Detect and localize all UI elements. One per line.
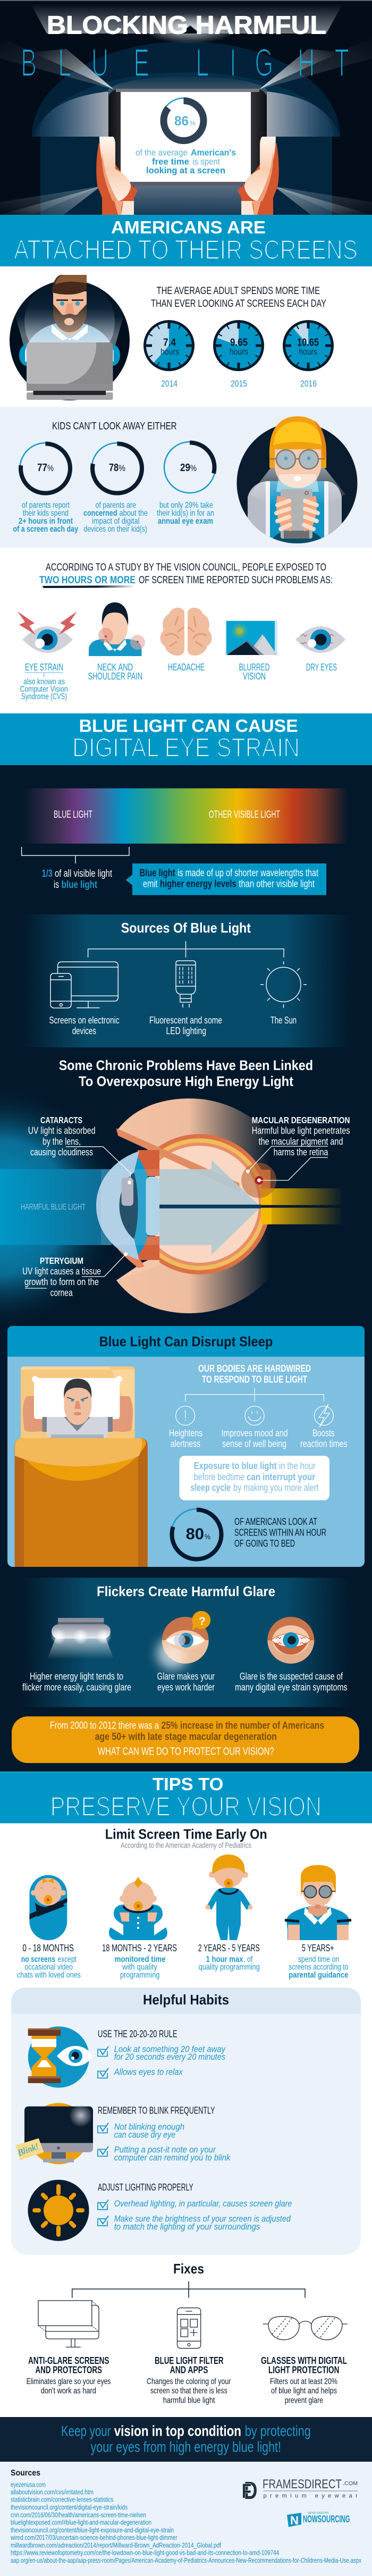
text: cataracts: CATARACTS <box>40 1115 82 1126</box>
panel: helpful habits <box>11 1987 361 2255</box>
text: age guidance: 1 hour max <box>206 1955 243 1964</box>
heading: Sources <box>11 2469 40 2478</box>
chart: light spectrum <box>22 788 349 844</box>
text: americans look at screens: SCREENS WITHIN AN HOUR <box>234 1528 326 1538</box>
logo: nowsourcing: DEVELOPED BY <box>308 2512 329 2515</box>
illustration: man in bed <box>15 1366 148 1571</box>
text: adjust lighting: ADJUST LIGHTING PROPERLY <box>98 2182 193 2193</box>
panel: fixes <box>27 2261 348 2405</box>
callout: exposure: Exposure to blue light <box>194 1461 276 1471</box>
text: symptom labels: VISION <box>243 671 266 682</box>
text: stat 78: impact of digital <box>92 517 139 526</box>
left hand <box>96 137 138 215</box>
source list <box>10 2480 361 2564</box>
text: age guidance: quality programming <box>199 1963 260 1972</box>
icon: standing child in onesie <box>205 1855 253 1940</box>
text: vision council study: TWO HOURS OR MORE <box>39 575 136 586</box>
text: filter fix: harmful blue light <box>163 2396 215 2405</box>
text: filter fix: AND APPS <box>170 2364 208 2375</box>
text: age guidance: , of <box>243 1955 253 1964</box>
chart: clock 2015: 9.65 <box>230 337 248 349</box>
text: stat 29: annual eye exam <box>158 517 213 526</box>
icon: sun lighting <box>28 2180 89 2241</box>
macula <box>241 1163 276 1198</box>
text: age guidance: screens according to <box>289 1963 348 1972</box>
text: filter fix: Changes the coloring of your <box>147 2377 231 2386</box>
panel: closing banner: Keep your <box>61 2423 111 2439</box>
heading: limit screen time: Limit Screen Time Early On <box>105 1826 267 1842</box>
text: vision council study <box>39 562 333 586</box>
text: effects: alertness <box>171 1439 200 1449</box>
tablet caption <box>136 148 236 175</box>
chart: clock 2016: 10.65 <box>297 337 319 349</box>
icon: glare eye <box>157 1611 210 1669</box>
icon: phone with apps <box>177 2308 201 2348</box>
source list: thevisioncouncil.org/content/blue-light-exposure-and-digital-eye-strain <box>11 2526 174 2534</box>
text: cataracts: by the lens, <box>43 1136 81 1147</box>
illustration: man at laptop <box>10 275 130 400</box>
logo: framesdirect: .COM <box>343 2481 358 2487</box>
text: source labels: devices <box>72 1026 96 1036</box>
donut 80% <box>171 1509 222 1560</box>
text: 20-20-20 rule: for 20 seconds every 20 minutes <box>114 2052 225 2062</box>
heading: Flickers Create Harmful Glare <box>97 1583 275 1599</box>
text: anti-glare fix: don't work as hard <box>41 2387 96 2396</box>
text: anti-glare fix: Eliminates glare so your eyes <box>27 2377 111 2386</box>
text: age labels <box>22 1943 334 1953</box>
callout: macular degeneration statistic <box>12 1716 359 1763</box>
panel: closing banner <box>0 2417 372 2462</box>
text: computer vision syndrome note <box>20 673 68 701</box>
logo: framesdirect: premium eyewear <box>264 2493 358 2499</box>
text: filter fix: BLUE LIGHT FILTER <box>155 2355 223 2366</box>
panel: kids section <box>0 407 372 555</box>
text: age guidance: parental guidance <box>289 1970 349 1979</box>
source list: wired.com/2017/03/uncertain-science-behind-phones-blue-light-dimmer <box>10 2533 177 2541</box>
iris and ciliary <box>96 1150 159 1260</box>
icon: monitor with blink note <box>15 2103 93 2164</box>
icon: alert <box>176 1406 195 1425</box>
text: age guidance: monitored time <box>115 1955 166 1964</box>
title glow <box>31 4 343 44</box>
chart: clock 2015: hours <box>230 347 248 357</box>
text: computer vision syndrome note: Computer Vision <box>20 685 68 694</box>
chart: clock 2014: 7.4 <box>163 337 176 349</box>
text: blink frequently: Putting a post-it note on your <box>114 2145 216 2155</box>
text: flicker captions: eyes work harder <box>157 1682 215 1692</box>
icon: strained eye <box>267 1617 315 1664</box>
heading: limit screen time <box>105 1826 267 1850</box>
text: flicker captions <box>22 1671 348 1692</box>
text: americans look at screens: OF AMERICANS LOOK AT <box>234 1516 317 1527</box>
optic beam <box>261 1170 343 1224</box>
chart: clock 2016: 2016 <box>300 379 317 389</box>
donut 29% <box>164 442 215 493</box>
callout: blue light wavelengths: emit <box>143 879 158 890</box>
heading: Helpful Habits <box>143 1992 229 2008</box>
text: stat 29: their kid(s) in for an <box>157 509 214 518</box>
text: stat 29 <box>157 501 214 526</box>
text: pterygium: UV light causes a tissue <box>22 1266 101 1277</box>
text: age guidance: occasional video <box>24 1963 73 1972</box>
bracket <box>22 847 129 863</box>
panel: hero header <box>0 0 372 231</box>
icon: sun <box>260 961 307 1008</box>
title line 1: BLOCKING HARMFUL <box>47 11 326 39</box>
text: one third of visible light: blue light <box>62 879 98 891</box>
icon: blurred vision <box>225 620 277 655</box>
donut 77%: % <box>47 463 54 473</box>
icon: bolt <box>314 1404 333 1427</box>
heading: Blue Light Can Disrupt Sleep <box>99 1333 273 1349</box>
donut 29%: % <box>190 463 197 473</box>
callout: macular degeneration statistic: 25% increase in the number of Americans <box>162 1721 324 1732</box>
text: macular degeneration: MACULAR DEGENERATION <box>252 1115 350 1126</box>
text: effects <box>169 1428 348 1449</box>
subheading: DIGITAL EYE STRAIN <box>72 733 300 762</box>
text: glasses fix <box>261 2355 347 2405</box>
text: age guidance: except <box>57 1955 77 1964</box>
icon: hourglass and eye <box>28 2026 94 2088</box>
text: stat 29: but only 29% take <box>159 501 213 510</box>
panel: sources footer <box>0 2462 372 2576</box>
text: stat 78 <box>83 501 148 534</box>
callout: blue light wavelengths <box>126 863 326 895</box>
text: blink frequently: REMEMBER TO BLINK FREQUENTLY <box>98 2105 215 2116</box>
text: glasses fix: prevent glare <box>285 2396 323 2405</box>
chart: light spectrum: OTHER VISIBLE LIGHT <box>209 809 280 820</box>
callout: macular degeneration statistic: WHAT CAN WE DO TO PROTECT OUR VISION? <box>98 1746 274 1758</box>
text: source labels <box>49 1015 297 1036</box>
text: blink frequently <box>98 2105 231 2163</box>
source list: allaboutvision.com/cvs/irritated.htm <box>11 2488 94 2496</box>
icon: flickering lamp <box>47 1618 114 1659</box>
connector <box>72 2281 305 2298</box>
text: macular degeneration <box>252 1115 350 1157</box>
text: stat 78: about the <box>119 509 148 518</box>
optic nerve line <box>159 1205 343 1209</box>
callout: blue light wavelengths: Blue light <box>139 868 175 879</box>
text: stat 77: of a screen each day <box>13 525 78 534</box>
text: source labels: The Sun <box>270 1015 297 1026</box>
chart: light spectrum: BLUE LIGHT <box>54 809 92 820</box>
callout: exposure <box>180 1456 329 1500</box>
logo: framesdirect <box>242 2477 358 2504</box>
source list: millwardbrown.com/adreaction/2014/report/Millward-Brown_AdReaction-2014_Global.pdf <box>11 2541 221 2549</box>
right hand <box>238 137 279 215</box>
text: pterygium <box>22 1256 101 1298</box>
donut 86%: 86 <box>174 114 189 129</box>
donut 78%: 78 <box>109 462 119 474</box>
text: anti-glare fix: AND PROTECTORS <box>35 2364 102 2375</box>
icon: anti-glare screen <box>38 2301 99 2347</box>
text: anti-glare fix <box>27 2355 111 2396</box>
hands <box>96 137 279 215</box>
text: age labels: 0 - 18 MONTHS <box>22 1943 74 1953</box>
heading: TIPS TO <box>153 1774 223 1794</box>
donut 78% <box>91 443 142 494</box>
callout lines <box>25 1146 328 1288</box>
text: one third of visible light: 1/3 <box>42 868 53 879</box>
text: macular degeneration: harms the retina <box>274 1147 328 1157</box>
text: stat 78: of parents are <box>96 501 136 510</box>
tablet caption: American's <box>191 148 236 158</box>
donut 80%: % <box>205 1532 210 1541</box>
source list: bluelightexposed.com/#blue-light-and-macular-degeneration <box>11 2519 151 2527</box>
heading: chronic problems: Some Chronic Problems Have Been Linked <box>59 1058 313 1073</box>
text: effects: Boosts <box>312 1428 335 1439</box>
callout: blue light wavelengths: is made of up of shorter wavelengths that <box>177 868 319 879</box>
callout: macular degeneration statistic: age 50+ with late stage macular degeneration <box>95 1732 277 1743</box>
text: macular degeneration: the macular pigment and <box>259 1136 343 1147</box>
heading: AMERICANS ARE <box>111 217 266 237</box>
blanket <box>15 1438 148 1571</box>
text: blink frequently: can cause dry eye <box>114 2130 175 2140</box>
text: symptom labels: NECK AND <box>97 662 133 673</box>
icon: dry eyes <box>295 626 345 653</box>
text: 20-20-20 rule: Look at something 20 feet away <box>114 2044 226 2054</box>
donut 29%: 29 <box>180 462 190 474</box>
donut 78%: % <box>119 463 125 473</box>
text: age labels: 2 YEARS - 5 YEARS <box>198 1943 260 1953</box>
icon: screens <box>50 962 118 1008</box>
text: anti-glare fix: ANTI-GLARE SCREENS <box>28 2355 109 2366</box>
text: effects: Improves mood and <box>221 1428 288 1439</box>
glasses <box>270 450 325 469</box>
text: one third of visible light: is <box>54 879 59 891</box>
icon: child with glasses <box>285 1865 351 1940</box>
text: flicker captions: flicker more easily, causing glare <box>22 1682 131 1692</box>
text: stat 77: 2+ hours in front <box>19 517 73 526</box>
text: 20-20-20 rule <box>98 2029 226 2078</box>
text: stat 77: their kids spend <box>23 509 69 518</box>
chart: clock 2016: hours <box>299 347 317 357</box>
text: pterygium: PTERYGIUM <box>40 1256 83 1266</box>
illustration: child with phone <box>237 416 357 555</box>
callout: blue light wavelengths: higher energy levels <box>160 879 236 890</box>
text: source labels: Screens on electronic <box>49 1015 120 1026</box>
heading: KIDS CAN'T LOOK AWAY EITHER <box>52 421 177 432</box>
icon: seated toddler <box>109 1877 167 1940</box>
text: source labels: LED lighting <box>166 1026 206 1036</box>
text: glasses fix: Filters out at least 20% <box>270 2377 337 2386</box>
text: average adult heading: THE AVERAGE ADULT SPENDS MORE TIME <box>157 286 320 297</box>
text: americans look at screens <box>234 1516 326 1549</box>
icon: glasses <box>263 2317 348 2340</box>
icon: led bulb <box>176 961 196 1008</box>
text: hardwired <box>198 1363 311 1385</box>
text: age guidance: with quality <box>122 1963 157 1972</box>
title line 2: BLUELIGHT <box>21 41 349 85</box>
chart: clock 2015 <box>213 320 264 389</box>
text: hardwired: OUR BODIES ARE HARDWIRED <box>198 1363 311 1374</box>
text: glasses fix: GLASSES WITH DIGITAL <box>261 2355 347 2366</box>
icon: monitor with blink note: Blink! <box>16 2141 40 2158</box>
text: glasses fix: LIGHT PROTECTION <box>268 2364 339 2375</box>
panel: tips to preserve band <box>0 1772 372 1823</box>
text: symptom labels: BLURRED <box>239 662 270 673</box>
heading: limit screen time: According to the American Academy of Pediatrics <box>121 1841 251 1850</box>
logo: nowsourcing <box>287 2512 350 2527</box>
text: hardwired: TO RESPOND TO BLUE LIGHT <box>202 1374 307 1385</box>
text: stat 78: concerned <box>83 509 117 518</box>
text: one third of visible light <box>42 868 113 891</box>
text: effects: reaction times <box>300 1439 348 1449</box>
panel: closing banner: vision in top condition <box>114 2423 241 2439</box>
text: flicker captions: Glare makes your <box>157 1671 215 1682</box>
text: stat 77 <box>13 501 78 534</box>
text: age guidance: spend time on <box>298 1955 339 1964</box>
text: computer vision syndrome note: also known as <box>23 677 65 686</box>
text: filter fix <box>147 2355 231 2405</box>
text: cataracts <box>28 1115 96 1157</box>
callout: exposure: in the hour <box>279 1461 316 1471</box>
text: glasses fix: of blue light and helps <box>271 2387 337 2396</box>
text: effects: Heightens <box>169 1428 202 1439</box>
text: cataracts: UV light is absorbed <box>28 1126 96 1136</box>
text: adjust lighting: to match the lighting of your surroundings <box>114 2222 260 2231</box>
heading: Sources Of Blue Light <box>121 920 251 936</box>
source list: eyezenusa.com <box>11 2480 46 2488</box>
text: filter fix: screen so that there is less <box>150 2387 227 2396</box>
callout: exposure: before bedtime <box>194 1472 244 1482</box>
text: age guidance: no screens <box>21 1955 55 1964</box>
text: age guidance <box>17 1955 349 1979</box>
panel: americans are attached band <box>0 215 372 266</box>
source list: https://www.reviewofoptometry.com/ce/the-lowdown-on-blue-light-good-vs-bad-and-its-connection-to-amd-109744 <box>11 2549 279 2557</box>
text: symptom labels: SHOULDER PAIN <box>88 671 142 682</box>
text: symptom labels <box>25 662 337 682</box>
callout: exposure: by making you more alert <box>233 1482 319 1493</box>
text: age guidance: programming <box>120 1970 159 1979</box>
donut 77%: 77 <box>37 462 47 474</box>
tablet <box>108 89 267 186</box>
text: adjust lighting <box>98 2182 292 2231</box>
text: source labels: Fluorescent and some <box>149 1015 222 1026</box>
donut 80%: 80 <box>186 1525 204 1543</box>
text: average adult heading <box>151 286 326 309</box>
text: harmful blue light: HARMFUL BLUE LIGHT <box>21 1203 86 1212</box>
text: pterygium: cornea <box>50 1288 73 1298</box>
panel: sources of blue light <box>21 914 351 1047</box>
panel: closing banner: your eyes from high energy blue light! <box>90 2439 281 2455</box>
text: stat 78: devices on their kid(s) <box>84 525 147 534</box>
chart: clock 2015: 2015 <box>231 379 247 389</box>
chart: clock 2014: hours <box>160 347 179 357</box>
tablet caption: of the average <box>136 148 188 158</box>
icon: glare eye: ? <box>199 1615 206 1627</box>
icon: brain headache <box>160 608 212 656</box>
diagram: eye anatomy <box>0 1098 350 1314</box>
chart: clock 2016 <box>283 320 334 389</box>
light arrow <box>159 1160 261 1255</box>
callout: exposure: sleep cycle <box>190 1482 231 1493</box>
source list: cnn.com/2016/06/30/health/americans-screen-time-nielsen <box>11 2511 146 2519</box>
heading: chronic problems: To Overexposure High Energy Light <box>79 1073 293 1089</box>
connector <box>185 1388 324 1402</box>
text: 20-20-20 rule: Allows eyes to relax <box>114 2068 183 2077</box>
panel: blue light can disrupt sleep <box>7 1326 365 1571</box>
phone and fingers <box>276 489 318 539</box>
callout: blue light wavelengths: than other visible light <box>239 879 315 890</box>
text: stat 77: of parents report <box>22 501 70 510</box>
text: 20-20-20 rule: USE THE 20-20-20 RULE <box>98 2029 177 2040</box>
text: age labels: 5 YEARS+ <box>302 1943 334 1953</box>
text: flicker captions: Glare is the suspected cause of <box>240 1671 343 1682</box>
logo: framesdirect: D <box>244 2477 257 2504</box>
source list: statisticbrain.com/corrective-lenses-statistics <box>11 2496 114 2504</box>
text: age guidance: chats with loved ones <box>17 1970 81 1979</box>
icon: neck and shoulder pain <box>89 602 145 656</box>
icon: smile <box>245 1406 264 1425</box>
text: pterygium: growth to form on the <box>24 1277 99 1287</box>
logo: framesdirect: F <box>242 2480 251 2503</box>
text: age labels: 18 MONTHS - 2 YEARS <box>102 1943 177 1953</box>
tablet caption: free time <box>152 157 189 166</box>
logo: framesdirect: FRAMESDIRECT <box>263 2477 342 2491</box>
callout: exposure: can interrupt your <box>247 1472 315 1482</box>
text: symptom labels: DRY EYES <box>306 662 337 673</box>
heading: chronic problems <box>59 1058 313 1089</box>
text: adjust lighting: Overhead lighting, in particular, causes screen glare <box>114 2199 292 2209</box>
icon: swaddled baby <box>29 1875 67 1940</box>
callout: macular degeneration statistic: From 2000 to 2012 there was a <box>50 1721 159 1732</box>
text: macular degeneration: Harmful blue light penetrates <box>252 1126 350 1136</box>
donut 86%: % <box>190 120 196 127</box>
retina layers <box>155 1134 268 1274</box>
text: symptom labels: HEADACHE <box>168 662 205 673</box>
panel: dark section background <box>0 765 372 1772</box>
text: symptom labels: EYE STRAIN <box>25 662 63 673</box>
text: blink frequently: computer can remind you to blink <box>114 2153 231 2163</box>
text: blink frequently: Not blinking enough <box>114 2122 184 2132</box>
logo: nowsourcing: N <box>290 2514 299 2527</box>
donut 77% <box>20 443 71 494</box>
connector <box>88 941 284 958</box>
text: americans look at screens: OF GOING TO BED <box>234 1538 295 1549</box>
icon: eye strain <box>18 611 77 653</box>
chart: clock 2014: 2014 <box>161 379 177 389</box>
text: flicker captions: Higher energy light tends to <box>30 1671 123 1682</box>
underline brush stroke <box>43 585 135 588</box>
text: effects: sense of well being <box>222 1439 286 1449</box>
tablet caption: is spent <box>192 157 220 166</box>
heading: Fixes <box>173 2261 204 2277</box>
laptop <box>27 342 113 400</box>
panel: flickers create harmful glare <box>21 1578 351 1707</box>
text: cataracts: causing cloudiness <box>30 1147 93 1157</box>
source list: thevisioncouncil.org/content/digital-eye-strain/kids <box>11 2503 128 2511</box>
chart: clock 2014 <box>143 320 195 389</box>
text: computer vision syndrome note: Syndrome (CVS) <box>21 692 67 701</box>
heading: BLUE LIGHT CAN CAUSE <box>79 716 298 736</box>
text: adjust lighting: Make sure the brightness of your screen is adjusted <box>114 2214 291 2223</box>
panel: closing banner: by protecting <box>245 2423 311 2439</box>
tablet caption: looking at a screen <box>146 166 225 175</box>
text: one third of visible light: of all visible light <box>55 868 113 879</box>
donut 86% <box>161 98 206 144</box>
text: average adult heading: THAN EVER LOOKING AT SCREENS EACH DAY <box>151 298 326 309</box>
panel: blue light can cause band <box>0 714 372 765</box>
